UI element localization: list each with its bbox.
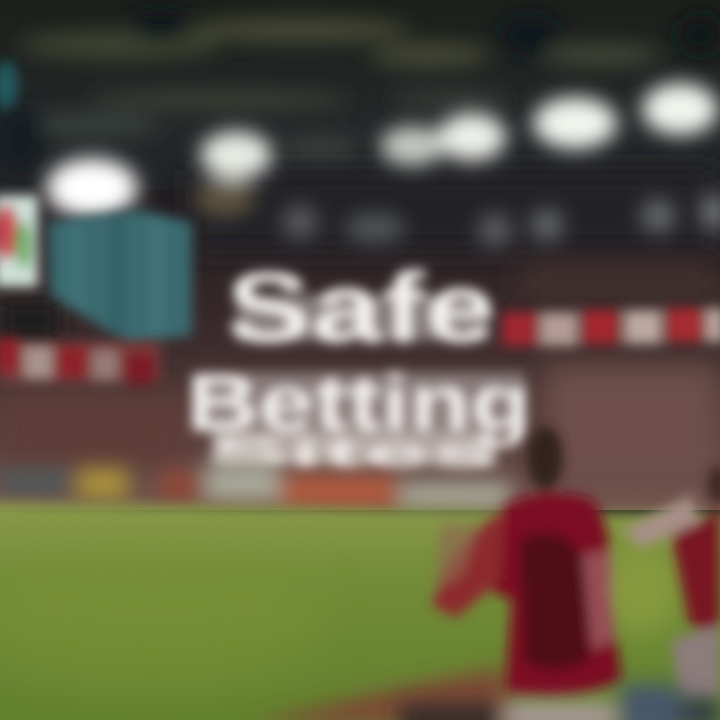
left banner — [0, 338, 160, 384]
headline: third line: Sites — [208, 429, 498, 478]
stadium roof — [0, 0, 720, 260]
bottom touchline — [250, 668, 520, 720]
teal screen panel — [48, 210, 192, 345]
player arm — [432, 510, 505, 618]
player in red shirt — [432, 426, 622, 696]
foreground crowd — [400, 684, 720, 720]
stands — [0, 170, 720, 510]
headline backing glow — [195, 295, 525, 466]
player head — [527, 426, 563, 490]
left colourful scoreboard — [0, 61, 38, 287]
second player — [625, 465, 720, 700]
pitch — [0, 502, 720, 720]
blurred headline text — [186, 252, 532, 478]
stadium lights — [46, 83, 720, 247]
right banner — [502, 308, 720, 346]
player torso — [490, 493, 622, 696]
headline: second line: Betting — [186, 358, 532, 447]
pitch-side boards — [0, 464, 510, 510]
headline: first line: Safe — [226, 252, 496, 364]
